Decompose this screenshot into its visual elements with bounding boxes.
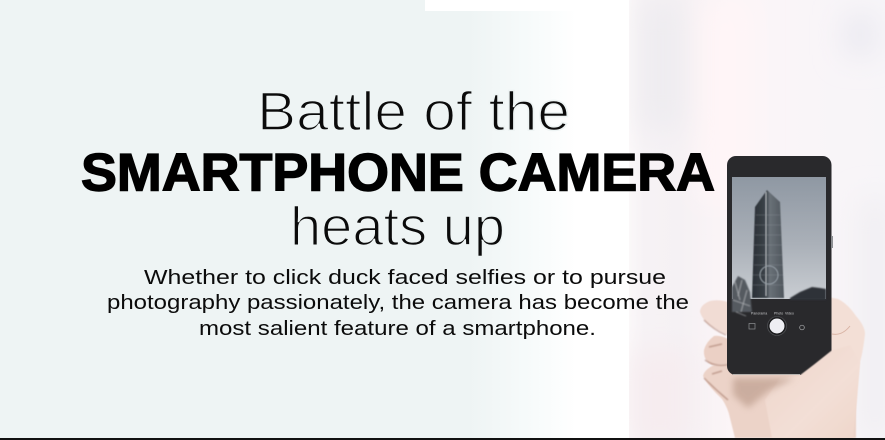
filter icon bbox=[800, 325, 804, 330]
title line: Battle of the: Battle of the bbox=[257, 80, 570, 142]
side button bbox=[831, 236, 833, 248]
thumb crease bbox=[832, 326, 850, 334]
shadow under phone bbox=[733, 378, 795, 408]
palm in front of phone bbox=[765, 345, 860, 438]
blurred building photo background bbox=[629, 0, 885, 440]
trees and ground bbox=[732, 276, 826, 316]
photographed tower bbox=[752, 190, 784, 298]
finger two bbox=[704, 336, 732, 365]
camera mode labels: Panorama bbox=[751, 312, 767, 316]
illustration: hand holding smartphone bbox=[700, 156, 865, 438]
finger shading bbox=[704, 320, 730, 400]
description text: Whether to click duck faced selfies or to pursue bbox=[144, 266, 666, 289]
title line: SMARTPHONE CAMERA: SMARTPHONE CAMERA bbox=[81, 144, 715, 202]
background panel bbox=[0, 0, 640, 440]
description text: most salient feature of a smartphone. bbox=[199, 317, 596, 340]
thumb behind phone bbox=[780, 297, 865, 438]
description text: photography passionately, the camera has become the bbox=[107, 291, 689, 314]
shutter button bbox=[769, 318, 785, 334]
smartphone body bbox=[727, 156, 832, 375]
phone bottom edge highlight bbox=[733, 374, 800, 376]
camera mode labels: Video bbox=[785, 312, 794, 316]
finger one bbox=[700, 300, 728, 335]
camera mode labels: Photo bbox=[774, 312, 783, 316]
camera screen sky bbox=[732, 177, 826, 299]
camera mode labels bbox=[751, 312, 794, 316]
gallery icon bbox=[749, 324, 755, 329]
finger three and palm bbox=[703, 364, 856, 438]
bottom rule bbox=[0, 438, 885, 440]
title line: heats up: heats up bbox=[290, 195, 505, 257]
description text bbox=[107, 266, 689, 340]
